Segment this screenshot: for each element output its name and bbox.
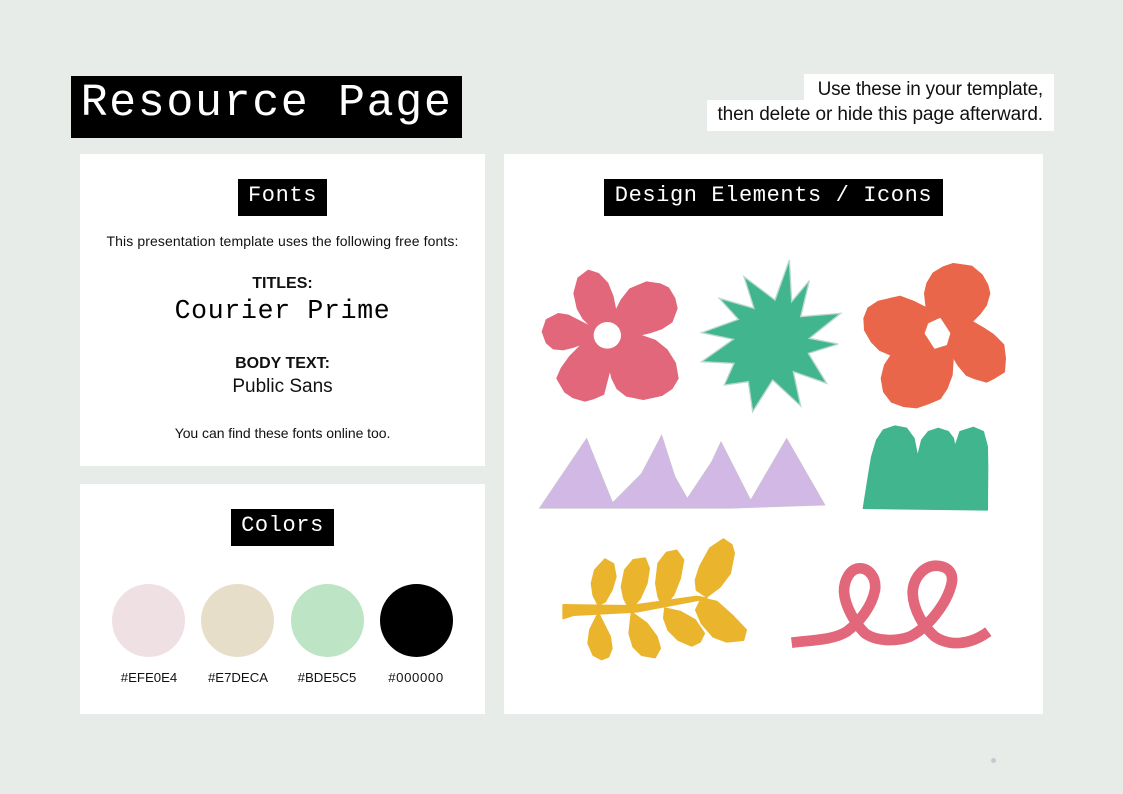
heading: design elements: Design Elements / Icons — [615, 183, 932, 208]
icon: green starburst — [702, 260, 841, 412]
background speck — [991, 758, 996, 763]
swatch label: black: #000000 — [388, 670, 444, 685]
instruction note — [707, 74, 1054, 131]
heading: design elements — [604, 179, 943, 216]
body font label: BODY TEXT: — [235, 355, 330, 372]
closing text: You can find these fonts online too. — [175, 425, 390, 441]
titles font label: TITLES: — [252, 275, 313, 292]
titles font name: Courier Prime — [175, 296, 390, 326]
swatch: black — [380, 584, 453, 657]
panel: design elements — [504, 154, 1043, 714]
swatch label: beige: #E7DECA — [208, 670, 268, 685]
icon: lilac zigzag — [539, 435, 825, 508]
heading: colors: Colors — [241, 513, 324, 538]
swatch: green — [291, 584, 364, 657]
icon: yellow leaf branch — [563, 539, 746, 659]
swatch: pink — [112, 584, 185, 657]
swatch label: green: #BDE5C5 — [298, 670, 356, 685]
heading: colors — [231, 509, 334, 546]
swatch label: pink: #EFE0E4 — [121, 670, 177, 685]
heading: fonts: Fonts — [248, 183, 317, 208]
heading: fonts — [238, 179, 327, 216]
icon: pink flower — [543, 271, 678, 401]
instruction note: Use these in your template, — [818, 79, 1043, 100]
icon: orange flower — [864, 264, 1005, 407]
icon: pink curl — [792, 566, 988, 643]
swatch: beige — [201, 584, 274, 657]
body font name: Public Sans — [232, 376, 333, 397]
instruction note: then delete or hide this page afterward. — [717, 104, 1043, 125]
intro text: This presentation template uses the following free fonts: — [106, 233, 458, 249]
title: Resource Page — [81, 78, 452, 129]
icon: green scallop — [863, 426, 988, 510]
panel: fonts — [80, 154, 485, 466]
panel: colors — [80, 484, 485, 714]
